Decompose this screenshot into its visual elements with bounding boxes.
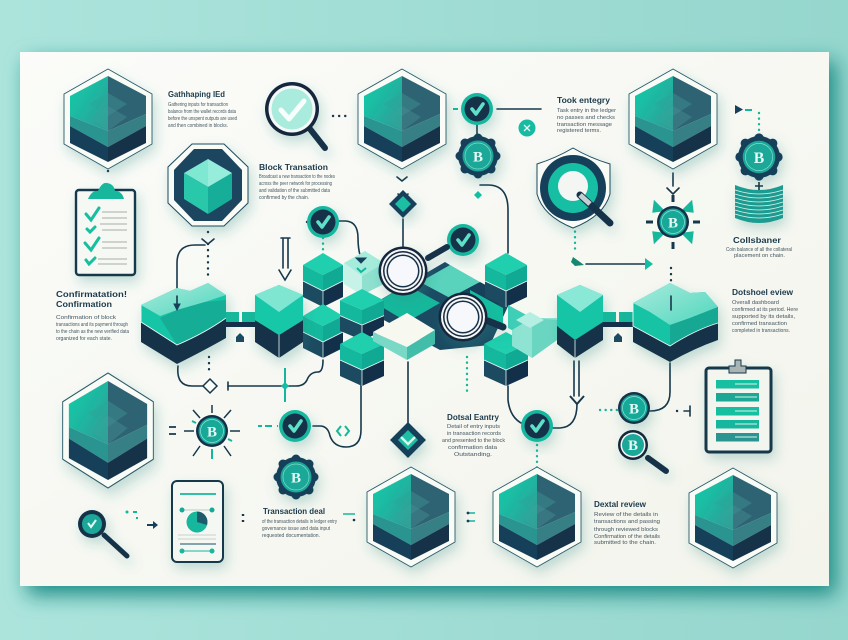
icon: diamond node top: [389, 190, 417, 218]
text: block transaction: and validation of the submitted data: [259, 188, 330, 194]
text: confirmation: to the chain as the new verified data: [56, 329, 129, 335]
icon: phone report: [172, 481, 223, 562]
text: transaction deal: Transaction deal: [263, 506, 325, 516]
text: gathering: before the unspent outputs are used: [168, 116, 237, 122]
cube F: [484, 332, 528, 386]
text: confirmation: transactions and its payment through: [56, 322, 128, 328]
icon: bitcoin with rays left: [184, 405, 240, 459]
hexagon block 2: [358, 69, 446, 169]
text: detail review: submitted to the chain.: [594, 540, 656, 546]
text: detail entry: [442, 412, 505, 458]
arrow: teal right arrow: [571, 257, 653, 270]
icon: magnifier lower left: [78, 510, 127, 556]
text: took entegry: transaction message: [557, 122, 612, 128]
main panel: [20, 52, 829, 586]
icon: target magnifier: [537, 148, 610, 228]
text: dashboard review: Dotshoel eview: [732, 287, 793, 297]
text: gathering: Gathhaping IEd: [168, 89, 225, 99]
icon: magnifier with bitcoin: B: [628, 438, 638, 454]
text: collsbaner: [726, 235, 792, 259]
cube C: [340, 289, 384, 340]
text: confirmation: [56, 289, 129, 342]
hexagon block 7: [689, 468, 777, 568]
mint cube right: [508, 305, 557, 358]
connector lines: [108, 109, 759, 468]
icon: clipboard list: [706, 360, 771, 452]
text: confirmation: Confirmatation!: [56, 289, 127, 299]
text: transaction deal: governance issue and data input: [262, 526, 330, 532]
icon: close badge: [518, 120, 536, 136]
icon: bitcoin badge lower: [274, 454, 318, 500]
text: confirmation: Confirmation: [56, 299, 112, 309]
text: block transaction: Broadcast a new transaction to the nodes: [259, 174, 335, 180]
text: took entegry: Task entry in the ledger: [557, 108, 616, 114]
text: detail review: through reviewed blocks: [594, 527, 658, 533]
text: detail entry: and presented to the block: [442, 438, 505, 444]
central block cluster: [303, 246, 557, 386]
octagon block badge: [168, 144, 248, 226]
icon: bitcoin badge top: [456, 134, 500, 178]
cube D: [340, 332, 384, 386]
text: gathering: Gathering inputs for transaction: [168, 102, 228, 108]
cube E: [485, 253, 527, 307]
text: detail review: [594, 499, 660, 546]
text: detail review: Confirmation of the details: [594, 534, 660, 540]
icon: bitcoin badge stack: [735, 133, 783, 223]
right large block: [633, 283, 718, 362]
icon: clipboard checklist: [76, 183, 135, 275]
icon: teal junction: [281, 382, 289, 390]
text: dashboard review: confirmed transaction: [732, 321, 787, 327]
text: gathering: and then combined in blocks.: [168, 123, 228, 129]
hexagon block 6: [493, 467, 581, 567]
text: block transaction: Block Transation: [259, 162, 328, 172]
left cube: [255, 285, 303, 358]
hexagon block 3: [629, 69, 717, 169]
dark back tiles: [375, 262, 510, 350]
text: took entegry: Took entegry: [557, 95, 610, 105]
cube A: [303, 253, 343, 307]
icon: magnifier with bitcoin: [618, 430, 666, 471]
icon: bitcoin with rays right: B: [668, 216, 678, 232]
text: transaction deal: requested documentation.: [262, 533, 320, 539]
hexagon block 4: [63, 373, 153, 488]
cube B: [303, 304, 343, 358]
icon: bitcoin badge top: B: [473, 150, 483, 166]
magnifier 1: [378, 246, 447, 296]
right cube: [557, 285, 603, 358]
small connector marks: [126, 510, 475, 529]
text: detail entry: Detail of entry inputs: [447, 424, 500, 430]
magnifier 2: [438, 292, 503, 342]
text: confirmation: organized for each state.: [56, 336, 112, 342]
text: confirmation: Confirmation of block: [56, 315, 116, 321]
mint cube back: [344, 251, 384, 295]
left large block: [141, 283, 226, 364]
icon: check badge lower left: [279, 410, 311, 442]
icon: arrow top right: [735, 105, 752, 114]
icon: bitcoin badge stack: B: [754, 150, 765, 167]
text: collsbaner: placement on chain.: [734, 253, 785, 259]
icon: check badge top: [461, 93, 493, 125]
icon: bitcoin with rays left: B: [207, 424, 217, 440]
icon: small diamond node: [203, 379, 217, 393]
text: collsbaner: Collsbaner: [733, 235, 782, 245]
text: collsbaner: Coin balance of all the collateral: [726, 247, 792, 253]
icon: bitcoin coin: [618, 392, 650, 424]
text: took entegry: no passes and checks: [557, 115, 615, 121]
text: detail entry: confirmation data: [448, 445, 497, 451]
icon: equals mark: [169, 427, 176, 434]
icon: code brackets: [337, 426, 349, 436]
icon: teal dot: [474, 191, 482, 199]
text: gathering: [168, 89, 237, 129]
hexagon block 1: [64, 69, 152, 169]
text: dashboard review: completed in transactions.: [732, 328, 790, 334]
text: gathering: balance from the wallet records data: [168, 109, 236, 115]
icon: check badge lower right: [521, 410, 553, 442]
text: block transaction: across the peer network for processing: [259, 181, 332, 187]
lines and arrow heads over blocks: [174, 258, 671, 404]
text: detail review: transactions and passing: [594, 519, 660, 525]
icon: check badge left: [307, 206, 339, 238]
text: took entegry: [557, 95, 616, 134]
text: detail review: Review of the details in: [594, 512, 658, 518]
connector right: [603, 312, 633, 342]
text: transaction deal: [262, 506, 337, 539]
icon: bitcoin coin: B: [629, 402, 639, 418]
icon: magnifier with check: [265, 82, 325, 148]
text: dashboard review: supported by its details,: [732, 314, 795, 320]
icon: bitcoin with rays right: [646, 195, 700, 249]
text: took entegry: registered terms.: [557, 128, 601, 134]
white tile: [373, 313, 435, 360]
text: block transaction: [259, 162, 335, 201]
text: dashboard review: confirmed at its period. Here: [732, 307, 798, 313]
text: dashboard review: Overall dashboard: [732, 300, 779, 306]
text: detail entry: Outstanding.: [454, 452, 492, 458]
icon: check badge centre: [447, 224, 479, 256]
text: detail entry: in transaction records: [447, 431, 501, 437]
icon: dashes before check: [258, 425, 278, 427]
text: transaction deal: of the transaction details in ledger entry: [262, 519, 337, 525]
text: detail review: Dextal review: [594, 499, 646, 509]
text: dashboard review: [732, 287, 798, 334]
icon: bitcoin badge lower: B: [291, 470, 301, 486]
connector left: [226, 312, 255, 342]
text: detail entry: Dotsal Eantry: [447, 412, 499, 422]
hexagon block 5: [367, 467, 455, 567]
text: block transaction: confirmed by the chain.: [259, 195, 309, 201]
icon: diamond node lower: [390, 422, 426, 458]
